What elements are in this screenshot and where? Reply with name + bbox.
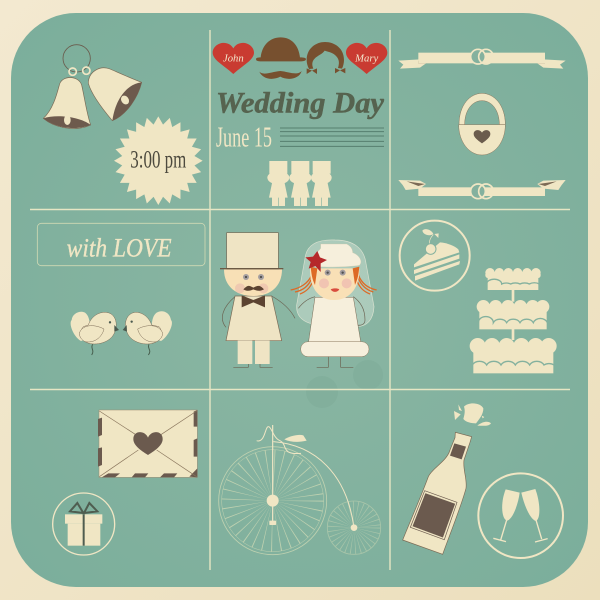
icon: tiered wedding cake — [470, 268, 557, 373]
ribbon bottom — [398, 180, 566, 199]
bride and groom — [220, 233, 377, 367]
date: June 15: June 15 — [216, 122, 272, 154]
top tier — [485, 268, 541, 290]
big wheel — [219, 447, 327, 555]
icon: love birds — [71, 311, 172, 355]
heart: John: John — [223, 53, 244, 64]
icon: bowler hat — [256, 37, 306, 61]
with LOVE banner: with LOVE — [67, 233, 172, 263]
time badge: 3:00 pm — [130, 145, 186, 173]
time badge — [114, 102, 217, 209]
saddle — [284, 435, 307, 442]
ribbon top — [398, 49, 566, 69]
heart: John — [213, 43, 254, 74]
groom — [220, 233, 295, 367]
icon: moustache — [259, 71, 302, 79]
icon: gift in circle — [53, 493, 115, 555]
heart: Mary — [346, 43, 387, 74]
frame — [257, 425, 354, 528]
title: Wedding Day: Wedding Day — [216, 86, 385, 119]
icon: champagne glasses — [478, 473, 563, 558]
ribbons and basket — [398, 49, 566, 199]
with LOVE banner — [37, 223, 205, 266]
cork and spray — [454, 403, 491, 426]
stains — [306, 360, 383, 408]
icon: envelope — [98, 410, 197, 477]
icon: red flower — [305, 251, 327, 272]
icon: wedding bells — [43, 45, 142, 128]
icon: cake slice — [400, 221, 470, 291]
icon: basket with heart — [459, 93, 505, 155]
icon: girl hair — [307, 42, 345, 74]
bride — [291, 240, 377, 367]
icon: three groom figures — [267, 161, 332, 206]
decorative date lines — [280, 128, 384, 146]
top centre names and heading — [213, 37, 387, 206]
icon: champagne bottle — [403, 403, 491, 554]
heart: Mary: Mary — [354, 53, 378, 64]
icon: penny-farthing bicycle — [219, 425, 381, 555]
middle tier — [477, 300, 549, 329]
small wheel — [327, 501, 381, 554]
bottom tier — [470, 338, 557, 373]
